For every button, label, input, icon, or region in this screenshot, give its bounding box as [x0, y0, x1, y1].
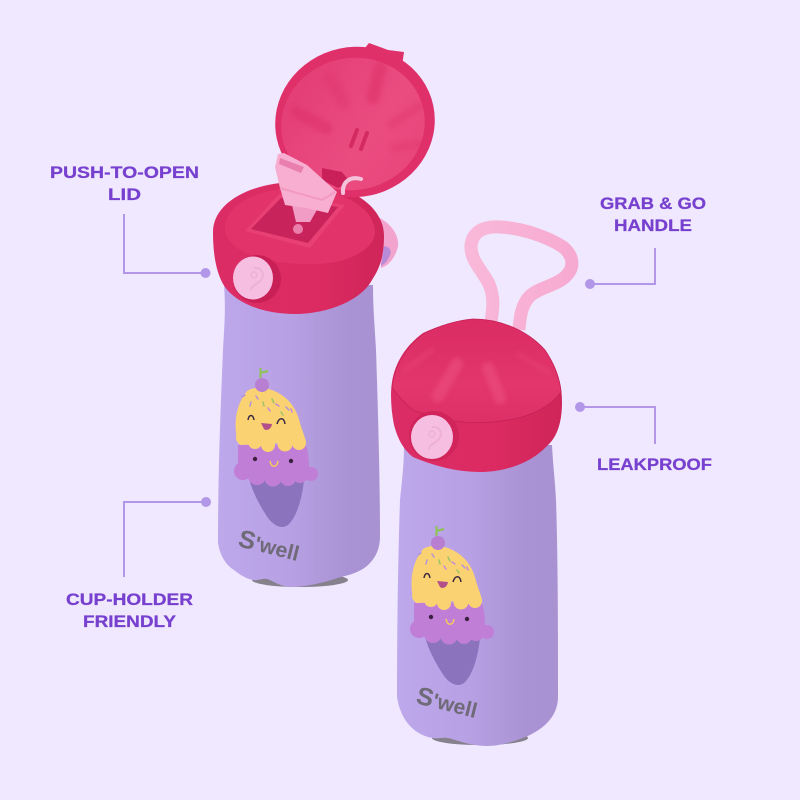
right bottle: closed lid — [391, 227, 572, 746]
ice cream character — [234, 368, 318, 527]
left bottle body — [218, 285, 380, 587]
sprinkles — [418, 553, 468, 573]
faces — [424, 574, 461, 582]
cherry — [260, 368, 268, 378]
label: PUSH-TO-OPEN — [50, 164, 199, 182]
brand logo: S'well — [236, 525, 302, 567]
callout: push-to-open lid — [50, 164, 210, 278]
dome ribs — [405, 350, 548, 398]
push button — [233, 255, 281, 303]
label: CUP-HOLDER — [66, 591, 193, 609]
label: LEAKPROOF — [597, 456, 712, 474]
open lid cap — [261, 32, 449, 212]
left lid base — [213, 182, 384, 314]
lid hinge — [322, 168, 350, 188]
lid top plate — [225, 188, 375, 264]
label: HANDLE — [614, 217, 692, 235]
left bottle shadow — [252, 573, 348, 587]
dot — [575, 402, 585, 412]
lid ribs — [296, 68, 420, 148]
lid slots — [351, 130, 367, 149]
right bottle body — [397, 445, 558, 746]
leader line — [124, 502, 206, 577]
ice cream character — [410, 526, 494, 685]
leader line — [590, 248, 655, 284]
cherry — [436, 526, 444, 536]
straw spout — [275, 153, 337, 234]
sprinkles — [242, 395, 292, 415]
carry handle — [471, 227, 572, 330]
right lid dome — [392, 319, 561, 423]
lid opening — [245, 194, 345, 248]
leader line — [124, 214, 205, 273]
dot — [585, 279, 595, 289]
right lid base — [391, 319, 562, 472]
label: FRIENDLY — [83, 613, 176, 631]
label: GRAB & GO — [600, 195, 706, 213]
leader line — [580, 407, 655, 444]
right bottle shadow — [432, 731, 528, 745]
label: LID — [108, 186, 141, 204]
dot — [201, 497, 211, 507]
brand logo: S'well — [414, 682, 480, 724]
right lid button — [409, 411, 459, 461]
hinge strap — [378, 217, 398, 268]
callout: leakproof — [575, 402, 712, 474]
left bottle: push-to-open lid open — [213, 32, 449, 587]
faces — [248, 416, 285, 424]
dot — [200, 268, 210, 278]
callout: cup-holder friendly — [66, 497, 211, 631]
callout: grab and go handle — [585, 195, 706, 289]
